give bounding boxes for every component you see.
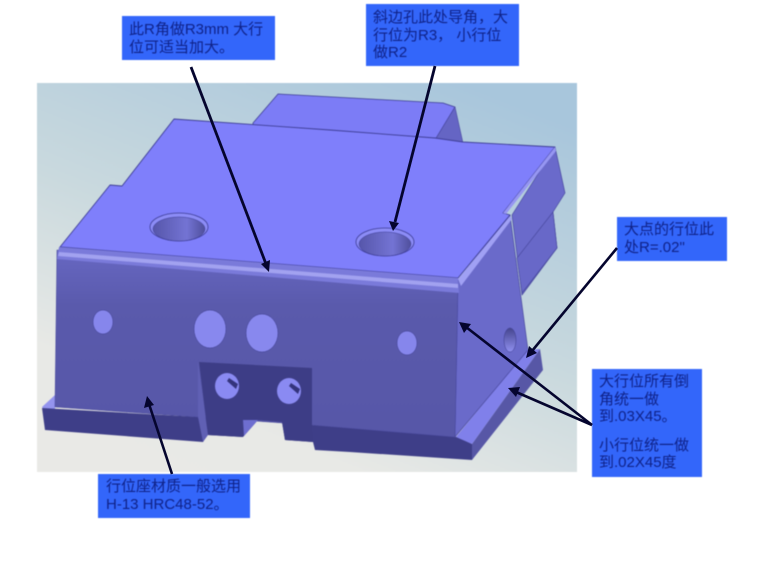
arrow: to large slide chamfer: [459, 322, 592, 425]
arrow: to top fillet: [191, 67, 270, 272]
block body: [42, 94, 565, 460]
callout: material: H-13 HRC48-52。: [106, 496, 229, 512]
callout: material: [98, 474, 250, 518]
callout: chamfer specifications: 角统一做: [599, 390, 659, 408]
callout: large slide radius: 处R=.02": [624, 238, 685, 256]
right rear side: [512, 147, 565, 295]
arrow: to block material: [144, 396, 172, 474]
arrow: to flange corner: [526, 248, 617, 358]
image background: [37, 83, 577, 472]
callout: chamfer specifications: 到.02X45度: [599, 454, 677, 471]
callout: angled hole: 行位为R3， 小行位: [373, 26, 501, 44]
side fillet: [458, 216, 512, 286]
base front strip: [42, 408, 472, 460]
callout: chamfer specifications: 到.03X45。 小行位统一做: [599, 408, 689, 454]
callout: material: 行位座材质一般选用: [106, 478, 241, 495]
callout: large slide radius: [617, 217, 727, 261]
callout: R corner: [122, 16, 275, 60]
callout: angled hole: [366, 4, 519, 66]
front holes: [93, 310, 113, 334]
base right strip: [472, 349, 543, 460]
top front fillet: [57, 247, 459, 293]
callout: large slide radius: 大点的行位此: [624, 221, 714, 238]
arrow: to small slide chamfer: [508, 387, 592, 425]
base left corner: [42, 395, 55, 411]
back raised section: [253, 94, 455, 140]
callout: chamfer specifications: [592, 369, 702, 477]
arrow: to angled hole: [389, 66, 435, 231]
front face: [55, 250, 458, 437]
callout: R corner: 位可适当加大。: [129, 38, 234, 56]
callout: angled hole: 做R2: [373, 44, 407, 61]
callout: angled hole: 斜边孔此处导角，大: [373, 9, 508, 26]
callout: chamfer specifications: 大行位所有倒: [599, 373, 689, 390]
top face: [60, 119, 555, 278]
dark slot block: [199, 362, 313, 442]
side face: [455, 215, 528, 437]
callout: R corner: 此R角做R3mm 大行: [129, 21, 263, 38]
top holes: [150, 213, 208, 241]
